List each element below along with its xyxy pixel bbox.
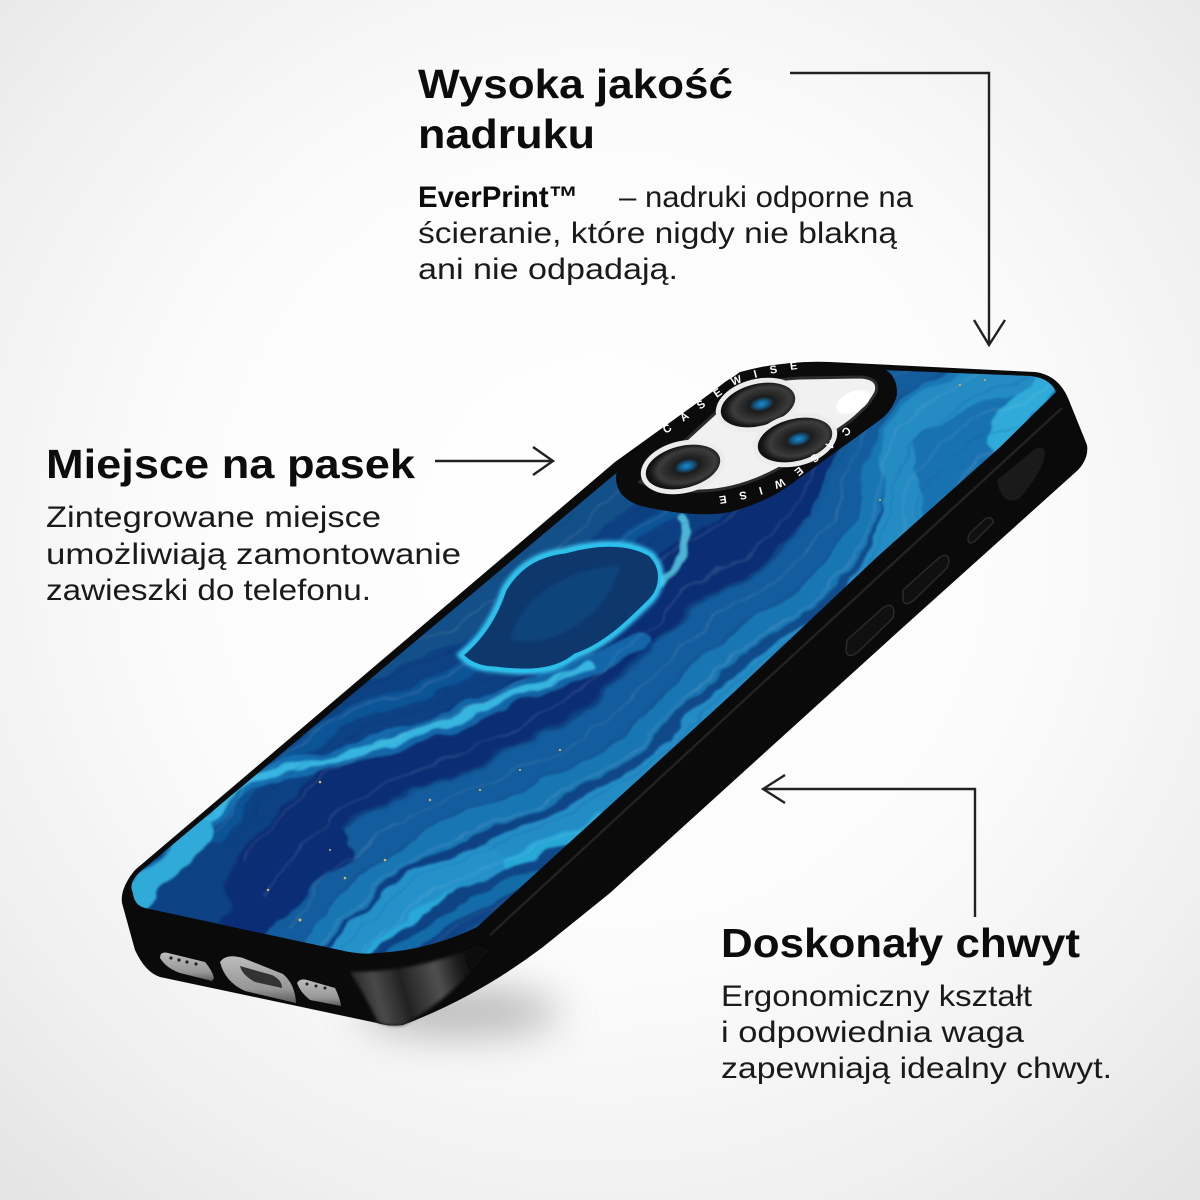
ring centre	[510, 565, 620, 642]
charging port	[220, 956, 296, 1003]
phone in blue agate case	[122, 362, 1088, 1028]
bottom ports	[160, 953, 341, 1006]
heading	[418, 61, 733, 157]
body text: umożliwiają zamontowanie	[46, 538, 461, 571]
heading: Miejsce na pasek	[46, 441, 415, 487]
camera island	[616, 362, 898, 514]
flash	[832, 385, 874, 419]
body text: Ergonomiczny kształt	[721, 980, 1033, 1013]
arrow to case	[790, 73, 1005, 345]
arrow to side	[763, 775, 975, 917]
lens right	[747, 404, 843, 476]
body text: ani nie odpadają.	[418, 253, 678, 286]
heading: Doskonały chwyt	[721, 920, 1080, 966]
lens left	[635, 431, 731, 503]
callout: strap slot	[46, 441, 553, 607]
marble artwork	[132, 370, 1056, 954]
body text: Zintegrowane miejsce	[46, 501, 381, 534]
body text: i odpowiednia waga	[721, 1016, 1024, 1049]
speaker right	[297, 979, 341, 1006]
brand bottom: CASEWISE	[719, 428, 850, 504]
brand top: CASEWISE	[663, 362, 798, 432]
speaker left	[160, 953, 214, 981]
arrow to slot	[435, 447, 553, 475]
body text: – nadruki odporne na	[619, 181, 913, 214]
body text: zapewniają idealny chwyt.	[721, 1052, 1112, 1085]
ring agate	[462, 545, 659, 670]
side buttons	[846, 448, 1045, 656]
lens top	[710, 369, 806, 441]
callout: grip	[721, 775, 1112, 1085]
speaker left holes	[169, 956, 198, 966]
body text: EverPrint™	[418, 181, 578, 214]
body text	[721, 980, 1112, 1085]
rim highlight	[490, 408, 1062, 935]
body text	[418, 181, 913, 286]
case glossy corner	[350, 945, 490, 1026]
gold flecks	[267, 379, 986, 922]
body text: zawieszki do telefonu.	[46, 574, 371, 607]
speaker right holes	[306, 982, 326, 990]
body text: ścieranie, które nigdy nie blakną	[418, 217, 897, 250]
darkening overlay	[132, 370, 1056, 954]
heading: Wysoka jakość	[418, 61, 733, 107]
port slot	[240, 966, 282, 988]
camera opening	[640, 377, 877, 491]
case body	[122, 362, 1087, 1026]
callout: print quality	[418, 61, 1005, 345]
heading: nadruku	[418, 111, 595, 157]
phone shadow	[360, 988, 560, 1036]
fine marble streaks	[208, 371, 1052, 954]
body text	[46, 501, 461, 607]
ring glow	[462, 545, 659, 670]
